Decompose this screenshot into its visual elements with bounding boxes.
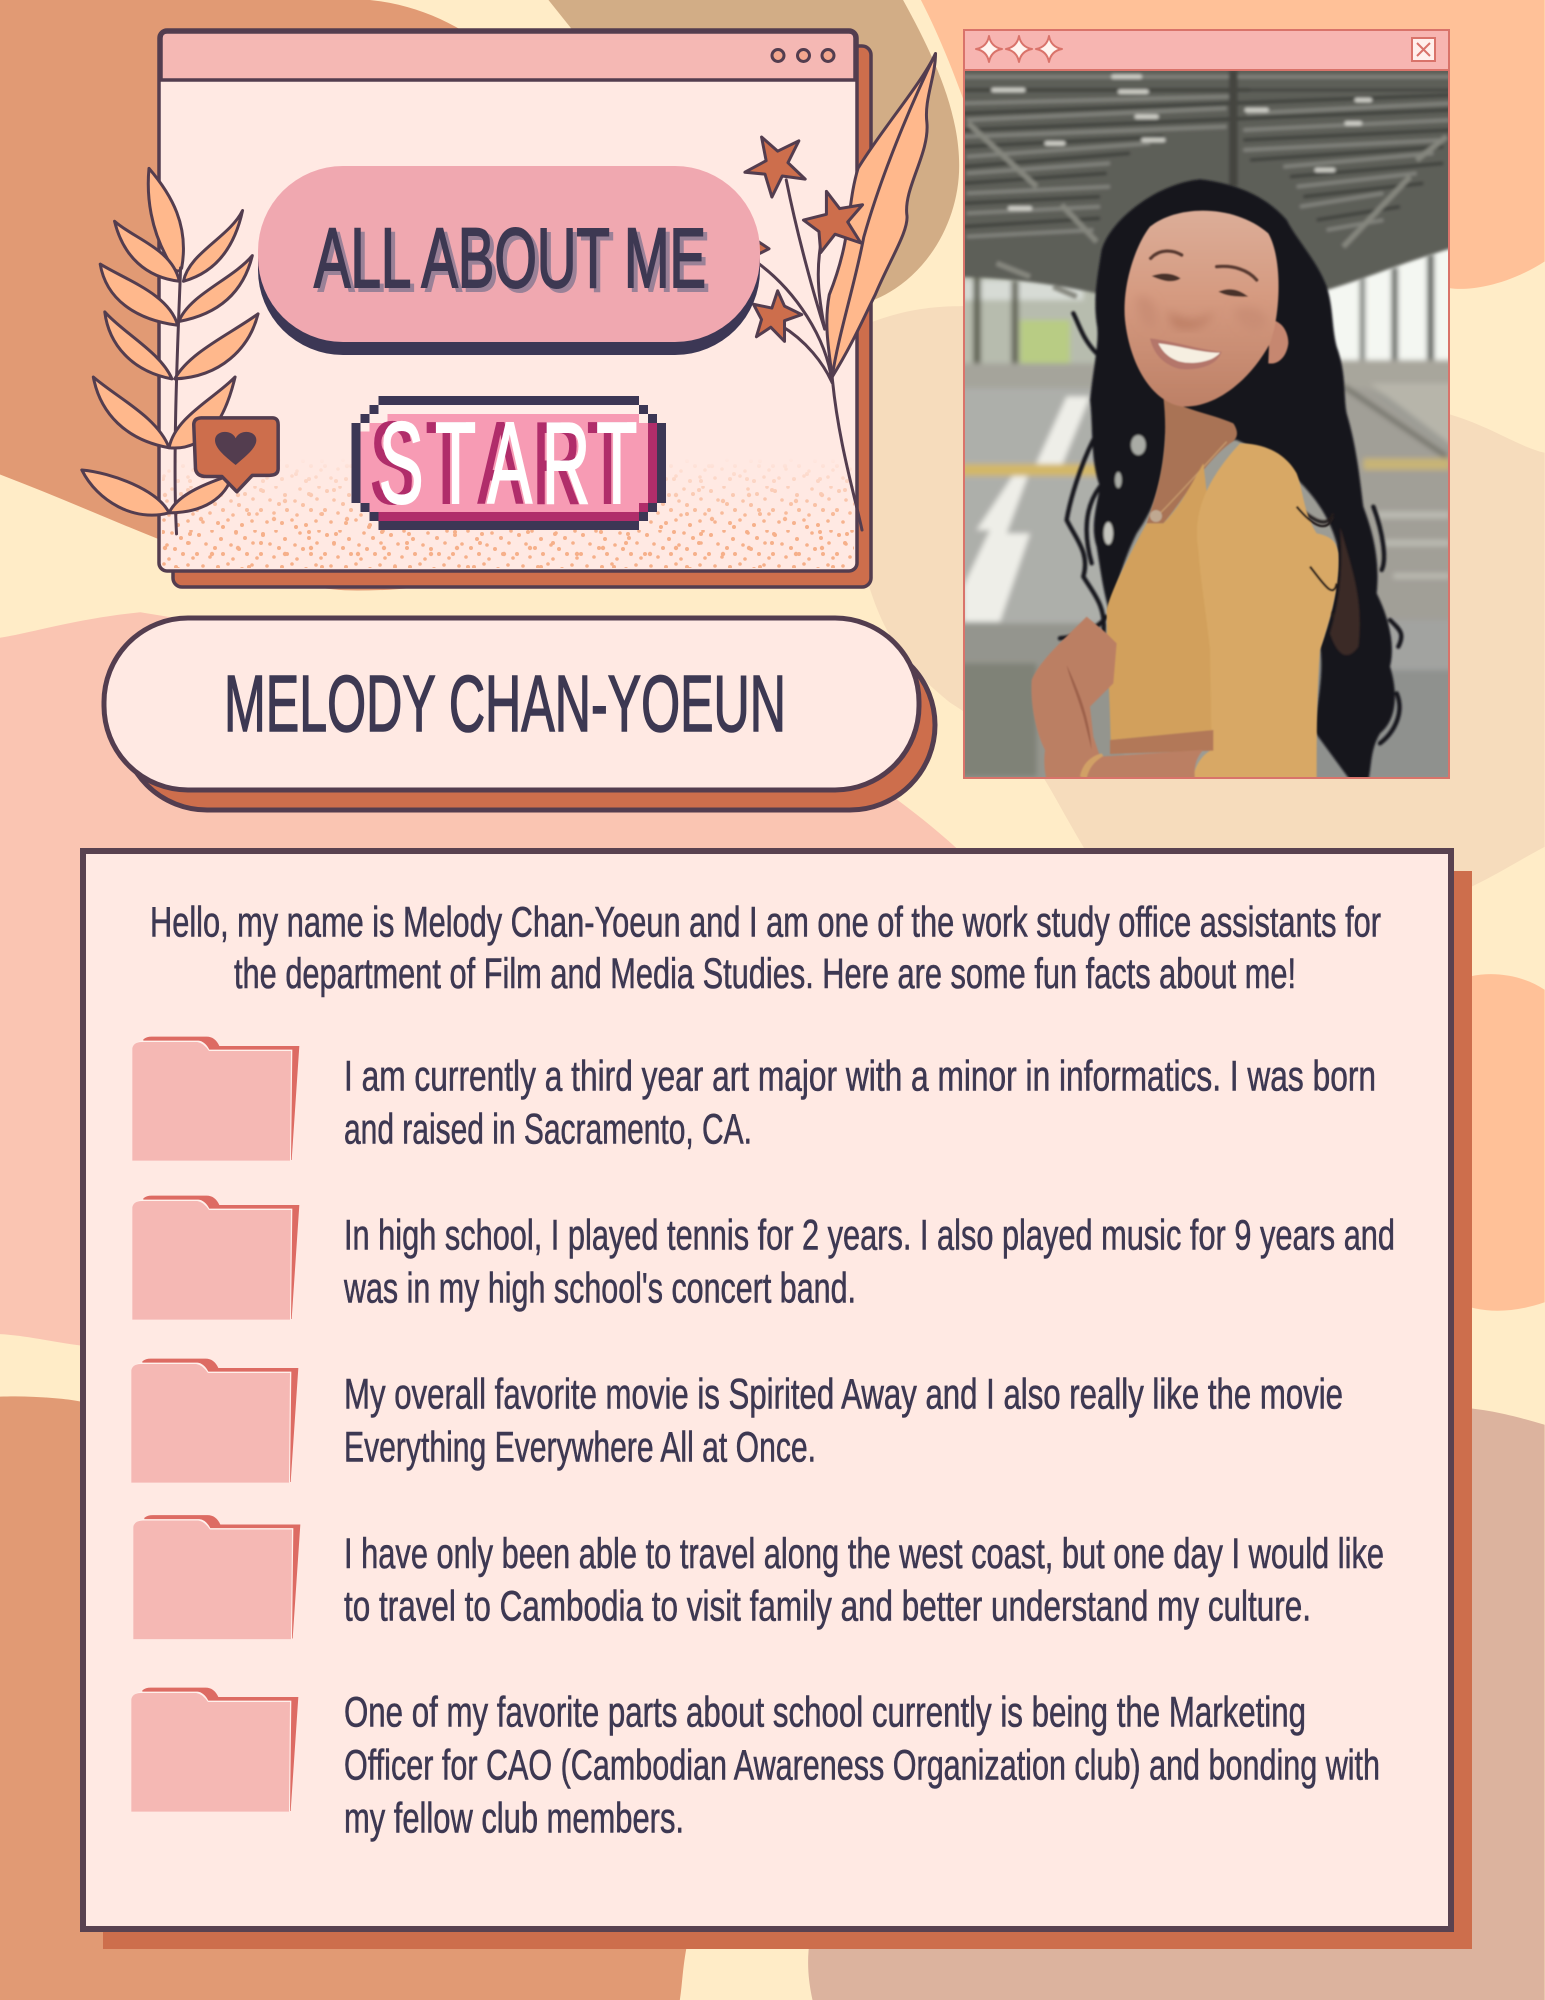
face [1125, 211, 1279, 407]
fact 5 [344, 1688, 1380, 1842]
icon: folder 1 [132, 1037, 299, 1161]
midriff and arm [1110, 730, 1213, 754]
icon: close box [1412, 38, 1435, 61]
panel: title window [159, 30, 857, 571]
icon: left plant [82, 168, 258, 534]
neck [1147, 397, 1237, 523]
lower wall [950, 623, 1123, 783]
heading pill: All About Me [258, 166, 760, 355]
icon: folder 2 [132, 1196, 299, 1320]
fact 1: and raised in Sacramento, CA. [344, 1106, 752, 1154]
icon: folder 4 [133, 1515, 300, 1639]
fact 3 [344, 1370, 1343, 1472]
icon: folder 3 [131, 1359, 298, 1483]
window title bar [161, 32, 855, 80]
nose shadow [1168, 314, 1208, 330]
START label shadow: START [369, 399, 628, 529]
wall [965, 362, 1093, 385]
photo frame [964, 70, 1449, 778]
top [1107, 463, 1223, 740]
name text: MELODY CHAN-YOEUN [224, 659, 786, 748]
panel: name pill [104, 618, 935, 810]
ground right [1333, 388, 1453, 620]
icon: sparkles [976, 36, 1062, 62]
fact 1 [344, 1052, 1376, 1154]
icon: folder 5 [131, 1688, 298, 1812]
ear [1268, 320, 1288, 364]
fact 4 [344, 1530, 1384, 1630]
icon: right plant [745, 54, 936, 530]
hair [1060, 179, 1401, 780]
ground left [950, 388, 1123, 623]
openings [965, 276, 1098, 365]
icon: heart bubble [194, 418, 278, 492]
fact 3: Everything Everywhere All at Once. [344, 1424, 816, 1472]
button: pixel START [352, 396, 666, 530]
fact 2 [343, 1212, 1395, 1312]
panel: fun facts [83, 851, 1451, 1929]
heading shadow: ALL ABOUT ME [318, 215, 710, 309]
stipple dots [162, 455, 854, 568]
photo title bar [964, 30, 1449, 70]
intro text [150, 898, 1381, 998]
photo: smiling woman with long dark hair in mustard top [965, 71, 1448, 777]
fact 2: was in my high school's concert band. [343, 1264, 856, 1312]
START label: START [379, 399, 637, 529]
window control dots [772, 50, 834, 62]
photo window [950, 30, 1470, 793]
heading text: ALL ABOUT ME [314, 211, 706, 305]
smile [1150, 338, 1222, 369]
brows and eyes [1151, 251, 1257, 280]
fact 5: my fellow club members. [344, 1794, 684, 1842]
main panel shadow [103, 871, 1472, 1949]
necklace [1160, 442, 1227, 513]
window shadow [173, 46, 871, 587]
ceiling [965, 71, 1448, 300]
